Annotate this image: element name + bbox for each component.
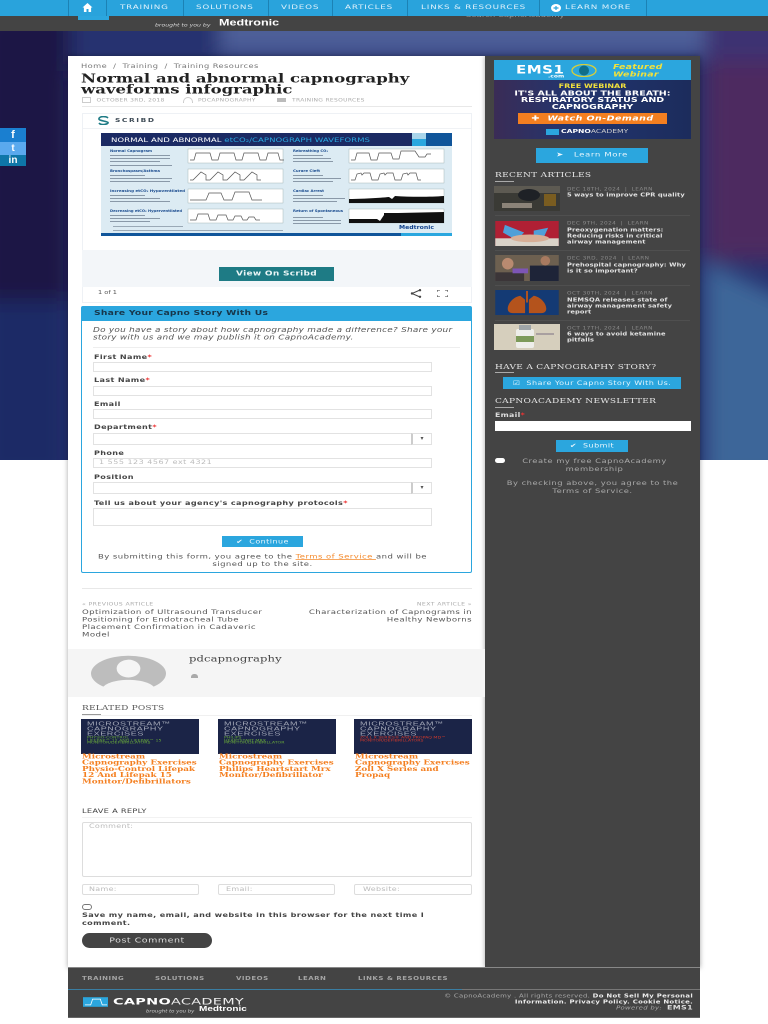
previous title bbox=[82, 609, 262, 639]
infographic preview: Return of Spontaneous bbox=[293, 209, 343, 213]
ad headline bbox=[514, 90, 671, 111]
article 1 bbox=[494, 186, 685, 211]
phone placeholder: 1 555 123 4567 ext 4321 bbox=[99, 459, 212, 466]
save checkbox bbox=[82, 904, 92, 910]
capnoacademy ad logo mark bbox=[546, 129, 559, 135]
thumbnail 3: ZOLL X SERIES® AND PROPAQ MD™ bbox=[360, 736, 446, 740]
newsletter email label: Email* bbox=[495, 412, 525, 418]
input: email bbox=[93, 409, 432, 419]
thumbnail 2 bbox=[218, 719, 336, 754]
thumbnail 1: CAPNOGRAPHY bbox=[87, 725, 164, 731]
label: first name: First Name* bbox=[94, 353, 152, 361]
infographic preview: Decreasing etCO₂ Hyperventilated bbox=[110, 209, 182, 213]
infographic preview: Cardiac Arrest bbox=[293, 189, 324, 193]
form terms bbox=[98, 553, 427, 568]
footer rule bbox=[68, 989, 700, 990]
article 4 title: airway management safety bbox=[567, 303, 672, 309]
article 4 title: report bbox=[567, 308, 591, 314]
next article link bbox=[309, 602, 472, 624]
email placeholder: Email: bbox=[226, 886, 253, 892]
article title bbox=[80, 72, 410, 97]
navigation bar bbox=[0, 0, 768, 16]
thumbnail 1 bbox=[81, 719, 199, 754]
thumbnail 3: MICROSTREAM™ bbox=[360, 720, 444, 726]
title 1: 12 And Lifepak 15 bbox=[82, 772, 172, 780]
article 3 bbox=[495, 255, 686, 281]
related post 2 bbox=[218, 719, 336, 780]
article 1 date: DEC 18TH, 2024 | LEARN bbox=[567, 187, 653, 192]
infographic preview: Curare Cleft bbox=[293, 169, 320, 173]
copyright text: Powered by: EMS1 bbox=[616, 1004, 693, 1011]
title 3: Microstream bbox=[355, 754, 418, 761]
form title: Share Your Capno Story With Us bbox=[94, 309, 268, 317]
thumbnail 3: CAPNOGRAPHY bbox=[360, 725, 437, 731]
membership terms: By checking above, you agree to the bbox=[507, 479, 678, 486]
ad photo tint bbox=[494, 80, 691, 139]
EMS1 logo: EMS1 bbox=[516, 63, 564, 76]
scribd logo bbox=[98, 116, 109, 125]
EMS1 dot com: .com bbox=[548, 74, 564, 79]
form intro text: Do you have a story about how capnography made a difference? Share your bbox=[93, 327, 452, 334]
membership label: membership bbox=[566, 465, 623, 472]
footer nav videos: VIDEOS bbox=[236, 976, 269, 982]
footer nav learn: LEARN bbox=[298, 976, 326, 982]
category: TRAINING RESOURCES bbox=[292, 98, 365, 103]
thumbnail 2: EXERCISES bbox=[224, 730, 281, 736]
post comment button bbox=[82, 933, 212, 948]
related heading text: RELATED POSTS bbox=[82, 705, 164, 713]
article 5 bbox=[494, 324, 690, 351]
article 1 title: 5 ways to improve CPR quality bbox=[567, 192, 685, 198]
related heading underline bbox=[82, 714, 101, 715]
title 2 bbox=[219, 754, 334, 780]
author: PDCAPNOGRAPHY bbox=[198, 98, 256, 103]
continue button bbox=[222, 536, 303, 547]
input: protocols bbox=[93, 508, 432, 526]
comment placeholder: Comment: bbox=[89, 823, 133, 830]
input: position bbox=[93, 482, 432, 494]
website placeholder: Website: bbox=[363, 886, 400, 892]
infographic preview: Rebreathing CO₂ bbox=[293, 149, 328, 153]
label: department: Department* bbox=[94, 423, 157, 431]
thumbnail 1: MICROSTREAM™ bbox=[87, 720, 171, 726]
form terms: signed up to the site. bbox=[212, 560, 313, 568]
scribd header rule bbox=[83, 128, 471, 129]
infographic preview: Normal Capnogram bbox=[110, 149, 152, 153]
footer nav training: TRAINING bbox=[82, 976, 124, 982]
article 4 bbox=[494, 290, 690, 316]
capnoacademy ad logo text: CAPNOACADEMY bbox=[561, 128, 628, 135]
title 2: Capnography Exercises bbox=[219, 760, 334, 767]
copyright text: Information. Privacy Policy. Cookie Notice. bbox=[515, 998, 693, 1004]
learn more button: ➤ Learn More bbox=[556, 151, 628, 159]
form intro text: story with us and we may publish it on CapnoAcademy. bbox=[93, 334, 354, 342]
infographic preview: Bronchospasm/Asthma bbox=[110, 169, 161, 173]
ad kicker: FREE WEBINAR bbox=[559, 83, 626, 90]
position dropdown bbox=[411, 482, 432, 494]
next title: Healthy Newborns bbox=[387, 617, 472, 624]
recent articles heading: RECENT ARTICLES bbox=[495, 172, 591, 179]
footer nav links: LINKS & RESOURCES bbox=[358, 976, 448, 982]
post comment button: Post Comment bbox=[109, 936, 185, 945]
department dropdown: ▾ bbox=[420, 435, 424, 442]
author icon bbox=[183, 97, 193, 103]
facebook button: f bbox=[11, 129, 15, 141]
thumbnail 3: EXERCISES bbox=[360, 730, 417, 736]
email input bbox=[218, 884, 335, 895]
title 2: Microstream bbox=[219, 754, 282, 761]
footer medtronic: Medtronic bbox=[199, 1005, 247, 1013]
author box bbox=[68, 649, 485, 697]
title 3: Propaq bbox=[355, 772, 390, 780]
title 3 bbox=[355, 754, 470, 780]
twitter button: t bbox=[11, 143, 15, 154]
footer logo bbox=[83, 996, 248, 1016]
Medtronic wordmark: Medtronic bbox=[219, 18, 279, 28]
article 5 title: 6 ways to avoid ketamine bbox=[567, 331, 666, 337]
submit button bbox=[556, 440, 628, 452]
featured webinar label: Webinar bbox=[613, 70, 659, 78]
article 3 title bbox=[567, 262, 686, 274]
article 3 title: is it so important? bbox=[567, 268, 638, 274]
nav articles: ARTICLES bbox=[345, 4, 393, 11]
watch on-demand button bbox=[518, 113, 667, 124]
nav links and resources: LINKS & RESOURCES bbox=[421, 4, 526, 11]
copyright text bbox=[368, 994, 693, 1011]
thumbnail 2: MONITOR/DEFIBRILLATOR bbox=[224, 742, 285, 746]
title 2: Philips Heartstart Mrx bbox=[219, 766, 331, 773]
position dropdown: ▾ bbox=[420, 484, 424, 491]
infographic preview: NORMAL AND ABNORMAL etCO₂/CAPNOGRAPH WAVEFORMS bbox=[111, 137, 370, 144]
title 1: Monitor/Defibrillators bbox=[82, 779, 191, 786]
input: department bbox=[93, 433, 432, 445]
view on scribd button: View On Scribd bbox=[236, 270, 317, 278]
article 2 bbox=[495, 221, 663, 246]
view on scribd button bbox=[219, 267, 334, 281]
article 2 title bbox=[567, 227, 663, 244]
name input bbox=[82, 884, 199, 895]
footer bbox=[68, 967, 700, 1018]
article 2 date: DEC 9TH, 2024 | LEARN bbox=[567, 221, 649, 226]
article 1 image bbox=[494, 186, 560, 211]
title 2: Monitor/Defibrillator bbox=[219, 772, 323, 780]
thumbnail 1: MONITOR/DEFIBRILLATORS bbox=[87, 742, 150, 746]
thumbnail 3: MONITOR/DEFIBRILLATORS bbox=[360, 739, 423, 743]
article 3 date: DEC 3RD, 2024 | LEARN bbox=[567, 256, 649, 261]
article 2 title: Preoxygenation matters: bbox=[567, 227, 663, 233]
learn more button bbox=[536, 148, 648, 163]
page count: 1 of 1 bbox=[98, 290, 117, 296]
title 3: Capnography Exercises bbox=[355, 760, 470, 767]
title 1: Microstream bbox=[82, 754, 145, 761]
article 4 image bbox=[494, 290, 560, 315]
title 1: Physio-Control Lifepak bbox=[82, 766, 195, 773]
embed button strip bbox=[82, 250, 472, 287]
next title bbox=[309, 609, 472, 624]
ad headline: RESPIRATORY STATUS AND bbox=[521, 96, 664, 104]
thumbnail 2: MICROSTREAM™ bbox=[224, 720, 308, 726]
membership terms bbox=[495, 479, 690, 495]
date: OCTOBER 3RD, 2018 bbox=[96, 98, 165, 103]
linkedin button: in bbox=[9, 155, 17, 166]
save label: Save my name, email, and website in this browser for the next time I bbox=[82, 911, 424, 918]
nav training: TRAINING bbox=[120, 4, 169, 11]
ad header bbox=[494, 60, 691, 80]
nav solutions: SOLUTIONS bbox=[196, 4, 254, 11]
title 3: Zoll X Series and bbox=[355, 766, 439, 773]
related posts heading bbox=[82, 704, 472, 716]
article title: waveforms infographic bbox=[81, 83, 292, 97]
header logo mark bbox=[78, 15, 109, 20]
author name: pdcapnography bbox=[189, 654, 282, 664]
EMS1 emblem bbox=[571, 64, 597, 77]
next title: Characterization of Capnograms in bbox=[309, 609, 472, 617]
sidebar panel bbox=[485, 56, 700, 968]
save label bbox=[82, 911, 424, 926]
share story button: ☑ Share Your Capno Story With Us. bbox=[513, 379, 671, 387]
header logo tagline: brought to you by bbox=[155, 23, 211, 28]
story form panel bbox=[81, 306, 472, 573]
article 2 title: Reducing risks in critical bbox=[567, 233, 662, 239]
article 3 title: Prehospital capnography: Why bbox=[567, 262, 686, 268]
previous title: Placement Confirmation in Cadaveric bbox=[82, 624, 256, 631]
newsletter email input bbox=[495, 421, 691, 430]
input: last name bbox=[93, 386, 432, 396]
copyright text: © CapnoAcademy . All rights reserved. Do Not Sell My Personal bbox=[444, 993, 693, 999]
featured webinar label bbox=[613, 63, 663, 78]
membership terms: Terms of Service. bbox=[552, 487, 633, 494]
name placeholder: Name: bbox=[89, 886, 117, 892]
webinar ad bbox=[494, 60, 691, 139]
date icon bbox=[82, 97, 91, 103]
label: email: Email bbox=[94, 400, 121, 408]
main white panel bbox=[68, 56, 485, 968]
form header bbox=[82, 307, 471, 320]
department dropdown bbox=[411, 433, 432, 445]
footer logo tagline: brought to you by bbox=[146, 1009, 194, 1014]
infographic preview bbox=[101, 133, 452, 236]
article 2 title: airway management bbox=[567, 238, 646, 244]
article 5 date: OCT 17TH, 2024 | LEARN bbox=[567, 326, 653, 331]
thumbnail 1: EXERCISES bbox=[87, 730, 144, 736]
infographic preview: Medtronic bbox=[399, 225, 434, 231]
article 5 image bbox=[494, 324, 560, 350]
nav videos: VIDEOS bbox=[281, 4, 319, 11]
footer logo mark bbox=[83, 997, 108, 1007]
membership label bbox=[505, 457, 684, 473]
label: position: Position bbox=[94, 473, 134, 481]
thumbnail 3 bbox=[354, 719, 472, 754]
fullscreen icon bbox=[437, 290, 448, 297]
related post 1 bbox=[81, 719, 199, 786]
article 2 image bbox=[495, 221, 559, 246]
hero background bbox=[0, 31, 768, 460]
ad headline: IT'S ALL ABOUT THE BREATH: bbox=[514, 90, 671, 98]
website input bbox=[354, 884, 472, 895]
watch on-demand button: ✚ Watch On-Demand bbox=[531, 114, 654, 123]
continue button: ✔ Continue bbox=[236, 538, 289, 545]
comment textarea bbox=[82, 822, 472, 877]
membership radio bbox=[495, 458, 505, 463]
previous label: « PREVIOUS ARTICLE bbox=[82, 602, 154, 607]
header bar bbox=[0, 15, 768, 31]
infographic preview: Increasing etCO₂ Hypoventilated bbox=[110, 189, 185, 193]
twitter button bbox=[0, 142, 26, 155]
nav learn more: LEARN MORE bbox=[565, 4, 631, 11]
thumbnail 2: CAPNOGRAPHY bbox=[224, 725, 301, 731]
breadcrumb: Home / Training / Training Resources bbox=[81, 62, 259, 70]
ad headline: CAPNOGRAPHY bbox=[552, 103, 633, 111]
facebook button bbox=[0, 128, 26, 142]
linkedin button bbox=[0, 155, 26, 166]
social share buttons bbox=[0, 128, 26, 166]
form terms: By submitting this form, you agree to the Terms of Service and will be bbox=[98, 553, 427, 560]
category icon bbox=[277, 98, 286, 102]
title 1: Capnography Exercises bbox=[82, 760, 197, 767]
leave a reply heading: LEAVE A REPLY bbox=[82, 807, 147, 815]
newsletter heading: CAPNOACADEMY NEWSLETTER bbox=[495, 398, 656, 405]
previous title: Model bbox=[82, 631, 110, 639]
thumbnail 1: PHYSIO-CONTROL bbox=[87, 736, 129, 740]
article 5 title: pitfalls bbox=[567, 337, 594, 343]
membership label: Create my free CapnoAcademy bbox=[522, 457, 667, 464]
thumbnail 2: HEARTSTART MRX bbox=[224, 739, 266, 743]
share icon bbox=[410, 289, 422, 298]
previous title: Positioning for Endotracheal Tube bbox=[82, 617, 239, 624]
article 4 title: NEMSQA releases state of bbox=[567, 297, 667, 303]
article meta bbox=[82, 97, 472, 107]
thumbnail 2: PHILIPS bbox=[224, 736, 242, 740]
related post 3 bbox=[354, 719, 472, 780]
previous article link bbox=[82, 602, 262, 639]
scribd embed bbox=[82, 113, 472, 303]
article 4 title bbox=[567, 298, 672, 315]
previous title: Optimization of Ultrasound Transducer bbox=[82, 609, 262, 617]
author avatar bbox=[91, 656, 166, 686]
form intro text bbox=[93, 327, 453, 342]
label: phone: Phone bbox=[94, 449, 124, 457]
share story button bbox=[503, 377, 681, 389]
next label: NEXT ARTICLE » bbox=[417, 602, 472, 607]
input: first name bbox=[93, 362, 432, 372]
nav home icon bbox=[82, 3, 92, 12]
title 1 bbox=[82, 754, 197, 786]
label: last name: Last Name* bbox=[94, 376, 150, 384]
nav learn more icon bbox=[551, 4, 561, 12]
submit button: ✔ Submit bbox=[570, 442, 614, 449]
article 3 image bbox=[495, 255, 559, 281]
article 5 title bbox=[567, 332, 666, 343]
article title: Normal and abnormal capnography bbox=[81, 72, 409, 86]
article 4 date: OCT 30TH, 2024 | LEARN bbox=[567, 291, 653, 296]
save label: comment. bbox=[82, 919, 130, 926]
story heading: HAVE A CAPNOGRAPHY STORY? bbox=[495, 364, 656, 371]
author link icon bbox=[191, 674, 198, 678]
footer logo wordmark: CAPNOACADEMY bbox=[113, 997, 244, 1007]
label: protocols: Tell us about your agency's capnography protocols* bbox=[94, 499, 348, 507]
scribd wordmark: SCRIBD bbox=[115, 116, 156, 123]
footer nav solutions: SOLUTIONS bbox=[155, 976, 205, 982]
thumbnail 1: LIFEPAK™ 12 AND LIFEPAK™ 15 bbox=[87, 739, 162, 743]
input: phone bbox=[93, 458, 432, 468]
featured webinar label: Featured bbox=[613, 63, 663, 71]
